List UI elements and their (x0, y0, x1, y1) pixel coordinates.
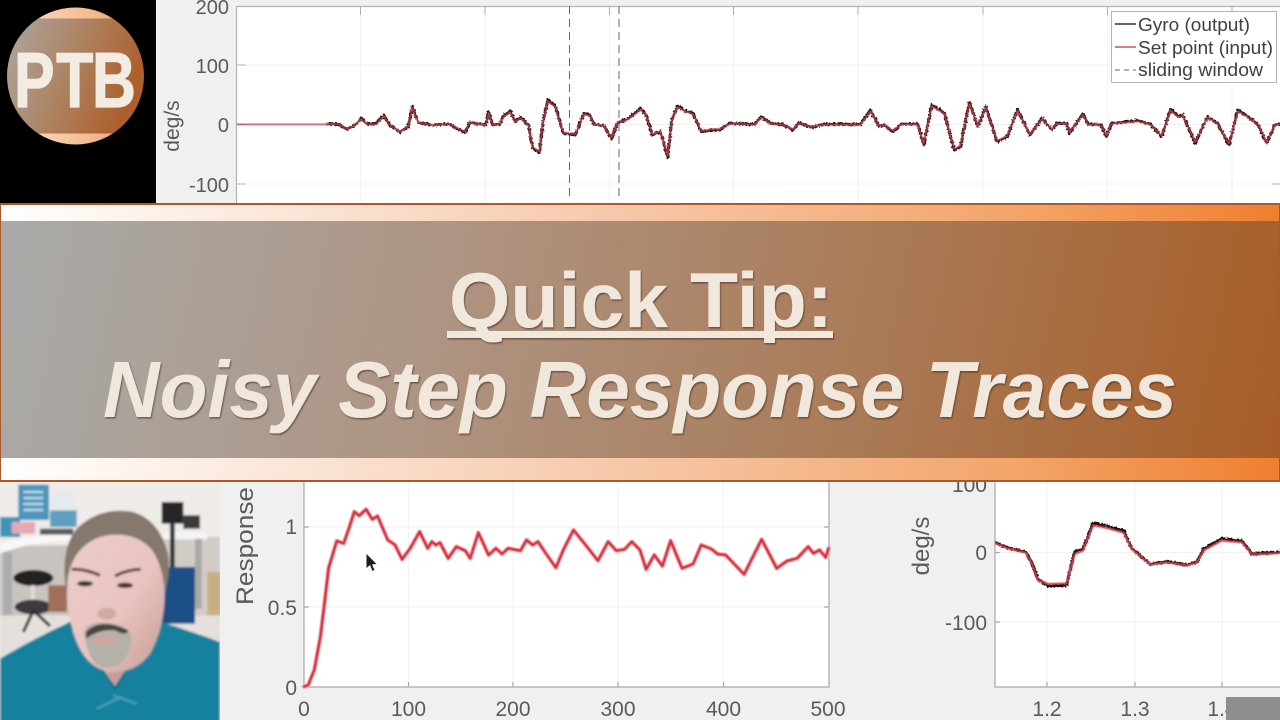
presenter mouth (92, 636, 118, 644)
panel: step response chart (232, 480, 846, 720)
presenter moustache (86, 624, 128, 639)
presenter nose shadow (97, 608, 116, 620)
logo: PTB circle: PTB (14, 37, 136, 124)
y axis title: deg/s (908, 517, 935, 575)
logo: PTB circle (7, 8, 144, 144)
y tick labels: 0.5 (268, 597, 297, 620)
presenter beard (84, 623, 132, 668)
presenter hair (64, 511, 169, 595)
zoomed gyro trace (995, 523, 1280, 586)
y axis tick labels: 100 (196, 56, 229, 78)
x tick labels (298, 698, 846, 720)
y axis title: deg/s (161, 100, 184, 152)
y tick labels: 1 (285, 516, 297, 539)
shirt stitching detail (97, 695, 137, 709)
y axis title: Response (232, 487, 259, 605)
title line one: Quick Tip: (449, 256, 833, 344)
y axis tick labels: -100 (189, 175, 229, 197)
y tick labels: 100 (952, 474, 987, 497)
legend entry: sliding window: sliding window (1138, 60, 1264, 80)
title line two: Noisy Step Response Traces (103, 345, 1177, 434)
y tick labels: 0 (285, 677, 297, 700)
panel: zoomed gyro chart (908, 474, 1280, 720)
presenter brows (72, 569, 141, 576)
y tick labels: 0 (975, 542, 987, 565)
legend entry: gyro: Gyro (output) (1138, 15, 1250, 35)
shirt collar detail (68, 622, 127, 690)
y axis tick labels (189, 0, 229, 197)
logo panel: black corner (0, 0, 156, 203)
sliding window dashed lines (570, 6, 619, 200)
y axis tick labels: 0 (218, 115, 229, 137)
presenter eyes (77, 581, 133, 588)
y tick labels (268, 516, 297, 700)
set point trace (237, 101, 1280, 156)
gyro output trace (noisy) (327, 100, 1280, 157)
banner: title band (0, 203, 1280, 482)
webcam: presenter (0, 475, 227, 720)
presenter neck (104, 670, 125, 686)
legend (1112, 12, 1276, 82)
presenter face (67, 535, 165, 672)
scrollbar thumb overlay (1226, 697, 1280, 720)
presenter shirt (0, 620, 220, 720)
legend entry: set point: Set point (input) (1138, 38, 1273, 58)
step response trace (304, 509, 829, 687)
x tick labels (1032, 698, 1237, 720)
webcam room background (0, 475, 227, 720)
y tick labels: -100 (945, 612, 987, 635)
icon: mouse cursor (366, 554, 376, 571)
y tick labels (945, 474, 987, 635)
panel: top gyro chart (161, 0, 1280, 204)
